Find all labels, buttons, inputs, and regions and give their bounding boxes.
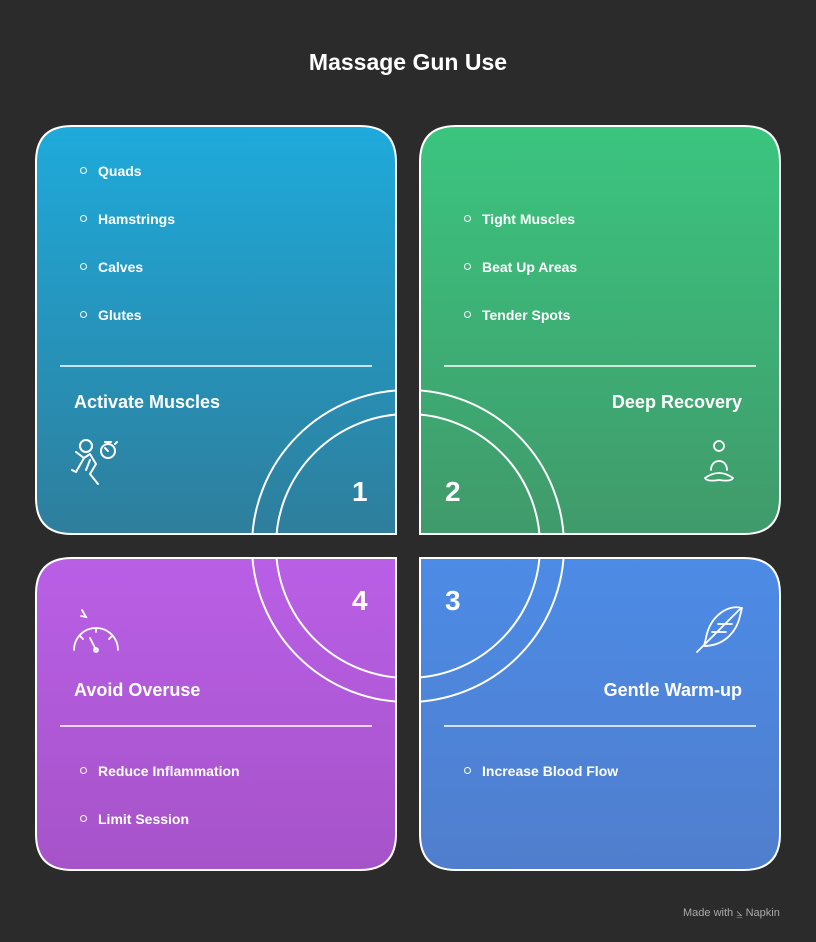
- icon: feather: [697, 607, 742, 652]
- text: Reduce Inflammation: [98, 763, 240, 779]
- icon: runner with stopwatch: [72, 440, 117, 484]
- panel 3: [420, 558, 780, 870]
- number 1: 1: [352, 476, 368, 507]
- panel 2: [420, 126, 780, 534]
- icon: meditation: [705, 441, 733, 481]
- text: Glutes: [98, 307, 142, 323]
- circles: [252, 390, 564, 702]
- heading 4: Avoid Overuse: [74, 680, 200, 700]
- panel 4: [36, 558, 396, 870]
- panels and circles: [35, 125, 781, 871]
- text: Calves: [98, 259, 143, 275]
- heading 3: Gentle Warm-up: [604, 680, 742, 700]
- number 2: 2: [445, 476, 461, 507]
- bullets: panel 4: [80, 763, 240, 827]
- text: Tight Muscles: [482, 211, 575, 227]
- icon: speedometer: [74, 610, 118, 652]
- text: Beat Up Areas: [482, 259, 577, 275]
- text: Hamstrings: [98, 211, 175, 227]
- heading 1: Activate Muscles: [74, 392, 220, 412]
- title: Massage Gun Use: [309, 49, 507, 75]
- text: Increase Blood Flow: [482, 763, 618, 779]
- panel 1: [36, 126, 396, 534]
- text: Limit Session: [98, 811, 189, 827]
- footer: Made with ⦥ Napkin: [683, 907, 780, 919]
- bullets: panel 2: [464, 211, 577, 323]
- text: Tender Spots: [482, 307, 570, 323]
- bullets: panel 1: [80, 163, 175, 323]
- number 3: 3: [445, 585, 461, 616]
- text: Quads: [98, 163, 142, 179]
- number 4: 4: [352, 585, 368, 616]
- heading 2: Deep Recovery: [612, 392, 742, 412]
- dividers: [60, 366, 756, 726]
